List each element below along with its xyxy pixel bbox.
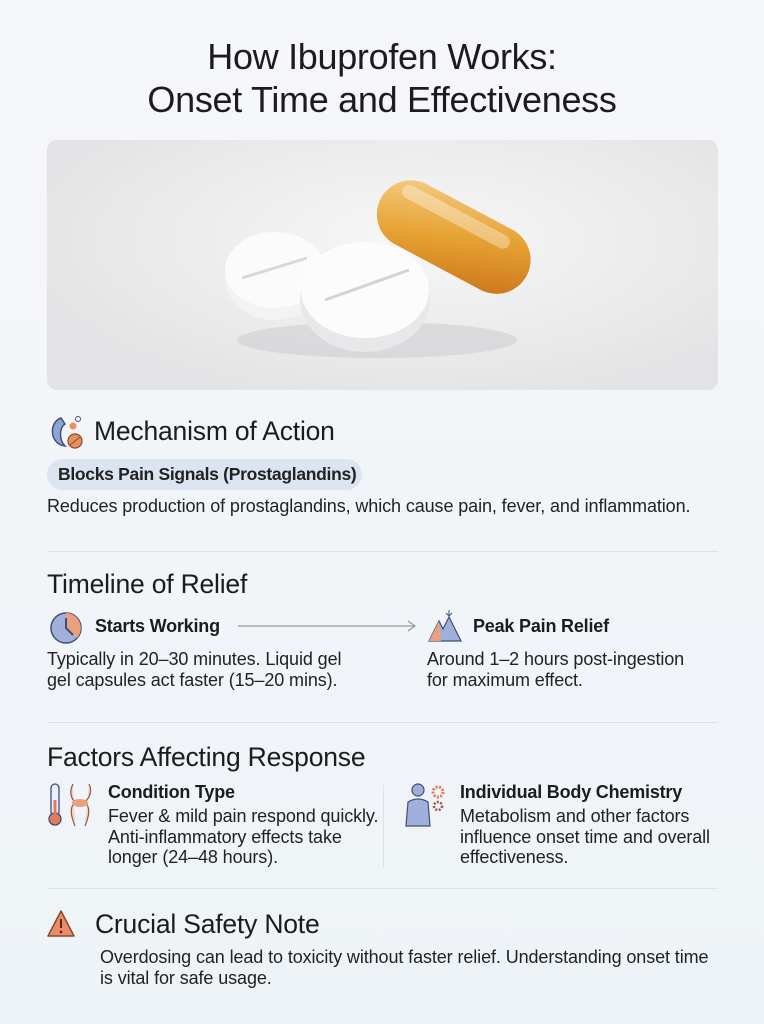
icon: body chemistry: [405, 783, 444, 827]
label: body chemistry: Individual Body Chemistry: [460, 782, 682, 802]
text: body chemistry: effectiveness.: [460, 847, 568, 867]
icon: mountain: [428, 610, 462, 642]
heading: factors: Factors Affecting Response: [47, 742, 365, 772]
text: mechanism: Reduces production of prostaglandins, which cause pain, fever, and inflammation.: [47, 496, 690, 516]
icon: warning: [47, 910, 75, 937]
icon: thermometer joint: [48, 783, 92, 826]
text: safety: Overdosing can lead to toxicity without faster relief. Understanding onset time: [100, 947, 708, 967]
image panel: pills: [47, 140, 718, 390]
title: Onset Time and Effectiveness: [147, 79, 617, 120]
heading: safety: Crucial Safety Note: [95, 909, 320, 939]
heading: mechanism: Mechanism of Action: [94, 416, 335, 446]
text: peak: for maximum effect.: [427, 670, 583, 690]
text: starts working: gel capsules act faster (15–20 mins).: [47, 670, 337, 690]
text: peak: Around 1–2 hours post-ingestion: [427, 649, 684, 669]
text: condition: longer (24–48 hours).: [108, 847, 278, 867]
badge: [47, 459, 362, 490]
text: peak: [427, 649, 684, 690]
label: peak relief: Peak Pain Relief: [473, 616, 609, 636]
text: body chemistry: [460, 806, 710, 867]
text: starts working: [47, 649, 341, 690]
label: starts working: Starts Working: [95, 616, 220, 636]
title: How Ibuprofen Works:: [207, 36, 557, 77]
text: condition: [108, 806, 378, 867]
label: condition type: Condition Type: [108, 782, 235, 802]
text: starts working: Typically in 20–30 minutes. Liquid gel: [47, 649, 341, 669]
text: safety: [100, 947, 708, 988]
text: body chemistry: influence onset time and overall: [460, 826, 710, 846]
badge: Blocks Pain Signals (Prostaglandins): [58, 464, 356, 484]
text: condition: Fever & mild pain respond quickly.: [108, 806, 378, 826]
arrow: [238, 620, 416, 632]
text: condition: Anti-inflammatory effects take: [108, 826, 342, 846]
title: [147, 36, 617, 120]
text: body chemistry: Metabolism and other factors: [460, 806, 689, 826]
icon: mechanism: [52, 416, 83, 449]
icon: clock: [50, 612, 82, 644]
heading: timeline: Timeline of Relief: [47, 569, 247, 599]
text: safety: is vital for safe usage.: [100, 968, 272, 988]
